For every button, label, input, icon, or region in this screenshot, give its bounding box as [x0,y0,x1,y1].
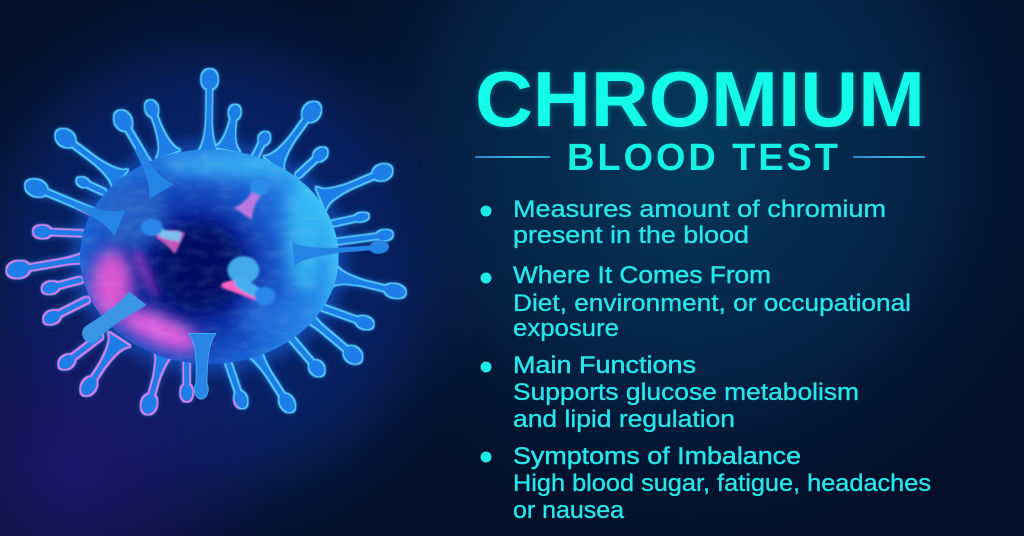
bright rim [285,180,322,293]
bullet: where it comes from: exposure [513,315,619,342]
sphere body [80,149,339,364]
bullet dot [480,206,492,216]
subtitle: blood test with rules: BLOOD TEST [567,137,838,179]
blue upper left [100,183,167,250]
bullet: measures [480,196,886,249]
bullet: main functions: and lipid regulation [513,406,735,433]
bullet: symptoms of imbalance: Symptoms of Imbalance [513,443,801,470]
spike rims [5,69,408,418]
front spikes on sphere [141,178,275,305]
lower front spikes [82,292,216,399]
pink crescent [91,250,132,320]
outer glow [5,69,408,418]
bullet: measures: present in the blood [513,222,749,249]
bullet: measures: Measures amount of chromium [513,196,886,223]
bullet: main functions: Main Functions [513,352,696,379]
bullet dot [480,362,492,372]
bullet: symptoms of imbalance: High blood sugar, fatigue, headaches [513,470,931,497]
bullet: where it comes from [480,262,911,342]
front spike top right [233,178,270,220]
bullet: symptoms of imbalance [480,443,931,524]
dark core [155,222,245,312]
illustration: glowing chromium particle [5,69,408,418]
front spike left [141,219,185,254]
spikes [5,69,408,418]
long spikes over sphere edge [68,141,390,266]
bullet dot [480,452,492,462]
front spike lower right [222,256,275,305]
bullet: where it comes from: Where It Comes From [513,262,771,289]
title: CHROMIUM: CHROMIUM [475,55,925,143]
bullet: symptoms of imbalance: or nausea [513,497,625,524]
bullet: main functions: Supports glucose metabolism [513,379,859,406]
bullet: where it comes from: Diet, environment, or occupational [513,290,911,317]
bullet: main functions [480,352,859,433]
fibrous texture [80,149,339,364]
title: CHROMIUM: CHROMIUM [475,55,925,143]
bullet dot [480,272,492,284]
